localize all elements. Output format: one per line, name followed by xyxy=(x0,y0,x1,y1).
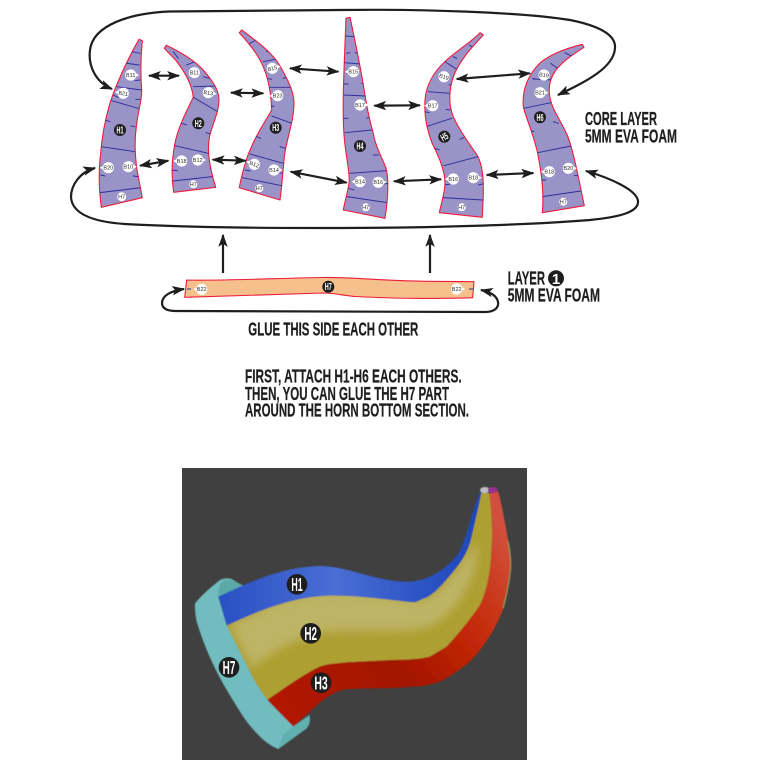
pattern piece H2: B11 xyxy=(190,71,199,77)
pattern piece H4: B14 xyxy=(355,180,365,186)
instructions text: FIRST, ATTACH H1-H6 EACH OTHERS. xyxy=(245,365,462,386)
pattern piece H5: H5 xyxy=(439,131,451,144)
pattern piece H4: H7 xyxy=(362,205,369,211)
pattern piece H5: B18 xyxy=(468,176,478,182)
label: layer 1: 1 xyxy=(552,271,560,288)
pattern piece H2: H7 xyxy=(190,182,197,188)
instructions text xyxy=(245,365,469,421)
caption: glue this side: GLUE THIS SIDE EACH OTHER xyxy=(248,319,418,340)
label: core layer: 5MM EVA FOAM xyxy=(585,125,677,146)
panel: 3D horn render xyxy=(182,468,527,760)
pattern piece H6 xyxy=(523,44,584,213)
pattern piece H2: H2 xyxy=(195,119,202,130)
pattern piece H4: B16 xyxy=(373,180,383,186)
H3 red strip xyxy=(267,492,511,727)
pattern piece H3: B23 xyxy=(273,94,283,100)
pattern piece H3: H7 xyxy=(256,186,263,192)
label H1: H1 xyxy=(291,574,303,595)
arrow: top loop H1 to H6 xyxy=(90,10,615,95)
pattern piece H1 xyxy=(99,39,142,207)
instructions text: THEN, YOU CAN GLUE THE H7 PART xyxy=(245,383,449,404)
pattern piece H5: B16 xyxy=(448,177,458,183)
pattern piece H4: H4 xyxy=(356,142,364,152)
pattern piece H2: B18 xyxy=(177,159,187,165)
pattern piece H1: H7 xyxy=(118,195,125,201)
pattern piece H5: H7 xyxy=(458,205,465,211)
pattern piece H7 band: B22 xyxy=(197,287,207,293)
H2 light band xyxy=(230,542,477,668)
pattern piece H6: B18 xyxy=(544,170,554,176)
pattern piece H2: B13 xyxy=(203,90,213,97)
pattern piece H1: B11 xyxy=(126,73,135,79)
H7 teal ring xyxy=(195,578,310,749)
double arrows between pieces xyxy=(140,68,533,183)
pattern piece H1: B20 xyxy=(103,166,113,172)
label: layer 1: LAYER xyxy=(508,267,545,288)
label: core layer: CORE LAYER xyxy=(585,108,657,129)
pattern piece H4: B17 xyxy=(355,103,365,109)
horn tip xyxy=(480,487,490,493)
pattern piece H7 band: B22 xyxy=(452,287,462,293)
label H3: H3 xyxy=(314,672,328,693)
pattern piece H5 xyxy=(424,33,483,217)
pattern piece H6: B19 xyxy=(539,72,549,80)
pattern piece H1: B21 xyxy=(118,90,128,98)
pattern piece H3: H3 xyxy=(272,123,279,134)
label H7: H7 xyxy=(223,657,235,678)
arrows up from H7 band xyxy=(223,235,430,273)
H1 blue strip xyxy=(218,491,483,626)
pattern piece H3: B15 xyxy=(267,65,278,73)
pattern piece H6: B21 xyxy=(535,91,545,97)
instructions text: AROUND THE HORN BOTTOM SECTION. xyxy=(245,400,469,421)
pattern piece H2: B12 xyxy=(193,158,203,164)
pattern piece H7 band: H7 xyxy=(325,282,332,293)
pattern piece H7 band xyxy=(185,277,474,298)
pattern piece H6: H6 xyxy=(536,113,544,124)
pattern piece H6: B20 xyxy=(563,166,573,172)
pattern piece H5: B17 xyxy=(428,104,438,110)
pattern piece H5: B19 xyxy=(438,73,449,82)
pattern piece H3 xyxy=(239,30,294,200)
label: layer 1 xyxy=(508,267,600,306)
pattern piece H3: B14 xyxy=(269,168,279,174)
arrow: glue loop under band xyxy=(162,289,498,312)
label H2: H2 xyxy=(304,623,317,644)
label: core layer xyxy=(585,108,677,146)
pattern piece H1: H1 xyxy=(116,126,124,136)
pattern piece H4 xyxy=(343,17,388,218)
pattern piece H4: B15 xyxy=(348,70,358,76)
arrow: bottom loop H1 to H6 xyxy=(71,168,638,228)
pattern piece H3: B12 xyxy=(248,161,260,170)
label: layer 1: 5MM EVA FOAM xyxy=(508,285,600,306)
H2 yellow strip xyxy=(226,492,493,700)
pattern piece H2 xyxy=(164,45,219,192)
pattern piece H6: H7 xyxy=(560,200,567,206)
pattern piece H1: B10 xyxy=(123,165,133,171)
